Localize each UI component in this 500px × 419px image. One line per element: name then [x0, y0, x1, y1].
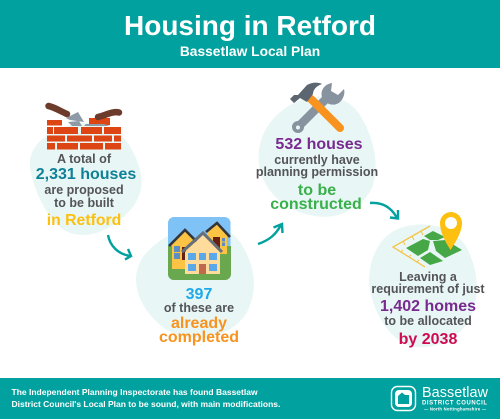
header banner [0, 0, 500, 68]
text: planning permission: planning permission [256, 165, 378, 179]
footer statement [12, 387, 280, 409]
text: currently have: currently have [274, 153, 360, 167]
text: already: already [171, 315, 227, 332]
panel: homes to allocate [369, 212, 485, 348]
footer statement: The Independent Planning Inspectorate has found Bassetlaw [12, 387, 258, 397]
icon: hammer and spanner [290, 83, 344, 133]
blob background [136, 224, 254, 338]
logo: Bassetlaw District Council: — North Nottinghamshire — [424, 406, 487, 412]
title: Housing in Retford [124, 10, 376, 41]
blob background [369, 224, 477, 347]
text: a total of: A total of [57, 152, 112, 166]
text: 1,402 homes: 1,402 homes [380, 298, 476, 315]
text: 397: 397 [186, 286, 212, 303]
text: to be allocated: to be allocated [384, 314, 472, 328]
blob background [259, 96, 376, 217]
blob background [30, 123, 141, 235]
text: constructed: constructed [270, 196, 362, 213]
text: completed: completed [159, 329, 239, 346]
text: to be built: to be built [54, 196, 115, 210]
text: to be: to be [298, 182, 336, 199]
subtitle: Bassetlaw Local Plan [180, 44, 320, 59]
arrow: third to fourth [370, 203, 398, 218]
panel: planning permission [256, 83, 378, 217]
text: by 2038: by 2038 [399, 331, 457, 348]
logo: Bassetlaw District Council: DISTRICT COUNCIL [422, 400, 487, 406]
arrow: second to third [258, 224, 282, 244]
text: in Retford: in Retford [47, 212, 121, 229]
panel: completed [136, 217, 254, 346]
panel: total houses [30, 106, 141, 235]
text: are proposed: are proposed [44, 183, 124, 197]
text: leaving a: Leaving a [399, 270, 458, 284]
text: of these are: of these are [164, 301, 234, 315]
logo: Bassetlaw District Council: Bassetlaw [422, 385, 489, 401]
text: 532 houses: 532 houses [275, 136, 363, 153]
icon: brick wall with hands and trowel [47, 106, 121, 150]
icon: houses [168, 217, 231, 280]
arrow: first to second [108, 235, 131, 260]
icon: map with pin [393, 212, 462, 267]
footer statement: District Council's Local Plan to be sound, with main modifications. [12, 399, 280, 409]
text: 2,331 houses: 2,331 houses [36, 166, 136, 183]
footer banner [0, 378, 500, 419]
text: requirement of just: requirement of just [371, 282, 485, 296]
logo: Bassetlaw District Council [392, 385, 489, 412]
